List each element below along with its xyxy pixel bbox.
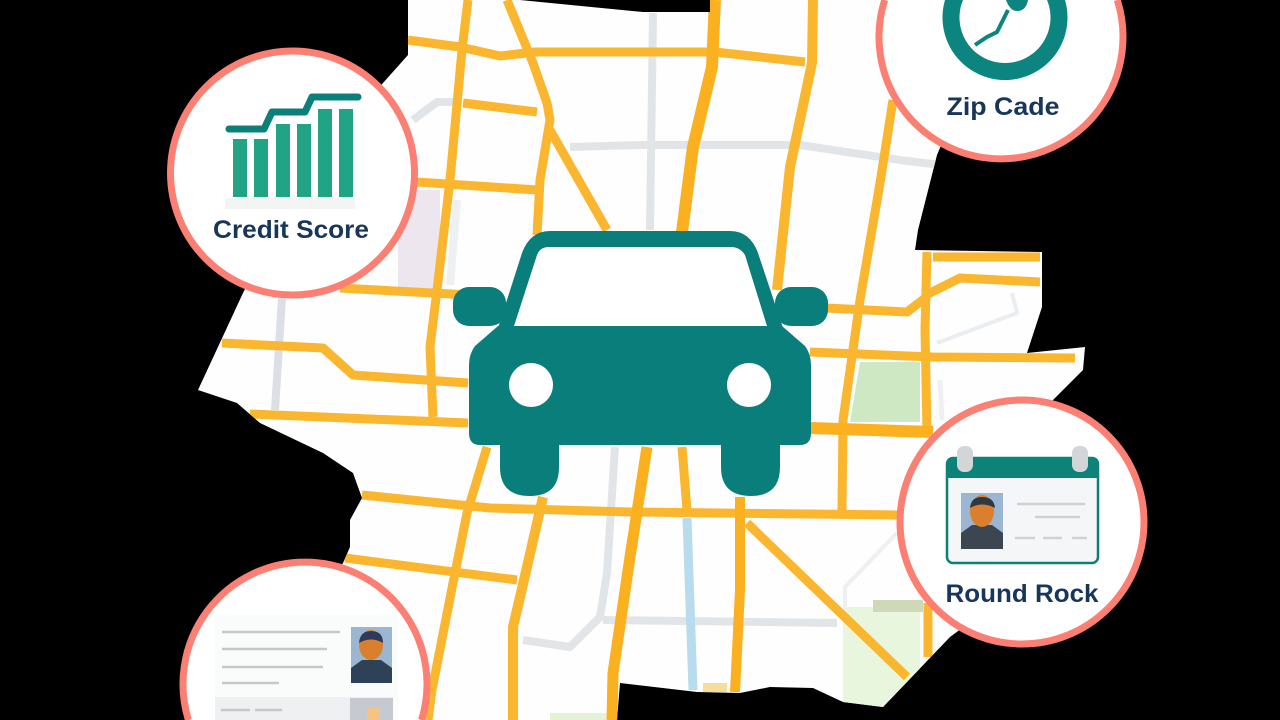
street map xyxy=(198,0,1085,720)
badge: zip code xyxy=(879,0,1123,159)
icon: car xyxy=(453,231,828,496)
badge: round rock xyxy=(900,400,1144,644)
ID photo xyxy=(961,493,1003,549)
car: roof and windshield xyxy=(498,231,783,328)
icon: gauge xyxy=(942,0,1068,80)
badge: license document xyxy=(183,562,427,720)
car: right mirror xyxy=(775,287,828,326)
map: orange roads xyxy=(222,0,1075,720)
car: left wheel xyxy=(500,440,559,496)
lower photo xyxy=(350,698,393,720)
label: round rock: Round Rock xyxy=(946,580,1099,608)
car: left headlight xyxy=(509,363,553,407)
map: grey minor roads xyxy=(275,13,1017,647)
infographic canvas xyxy=(167,0,1148,720)
icon: ID card xyxy=(946,446,1099,563)
document photo xyxy=(351,627,392,683)
label: credit score: Credit Score xyxy=(213,216,369,244)
car: body xyxy=(469,326,811,445)
map: river xyxy=(687,518,693,690)
badge: credit score xyxy=(170,51,414,295)
car: right headlight xyxy=(727,363,771,407)
icon: bar chart xyxy=(225,97,358,209)
icon: document with photo xyxy=(215,615,398,720)
label: zip code: Zip Cade xyxy=(946,93,1060,121)
map: parks xyxy=(398,190,923,720)
car: left mirror xyxy=(453,287,506,326)
car: right wheel xyxy=(721,440,780,496)
